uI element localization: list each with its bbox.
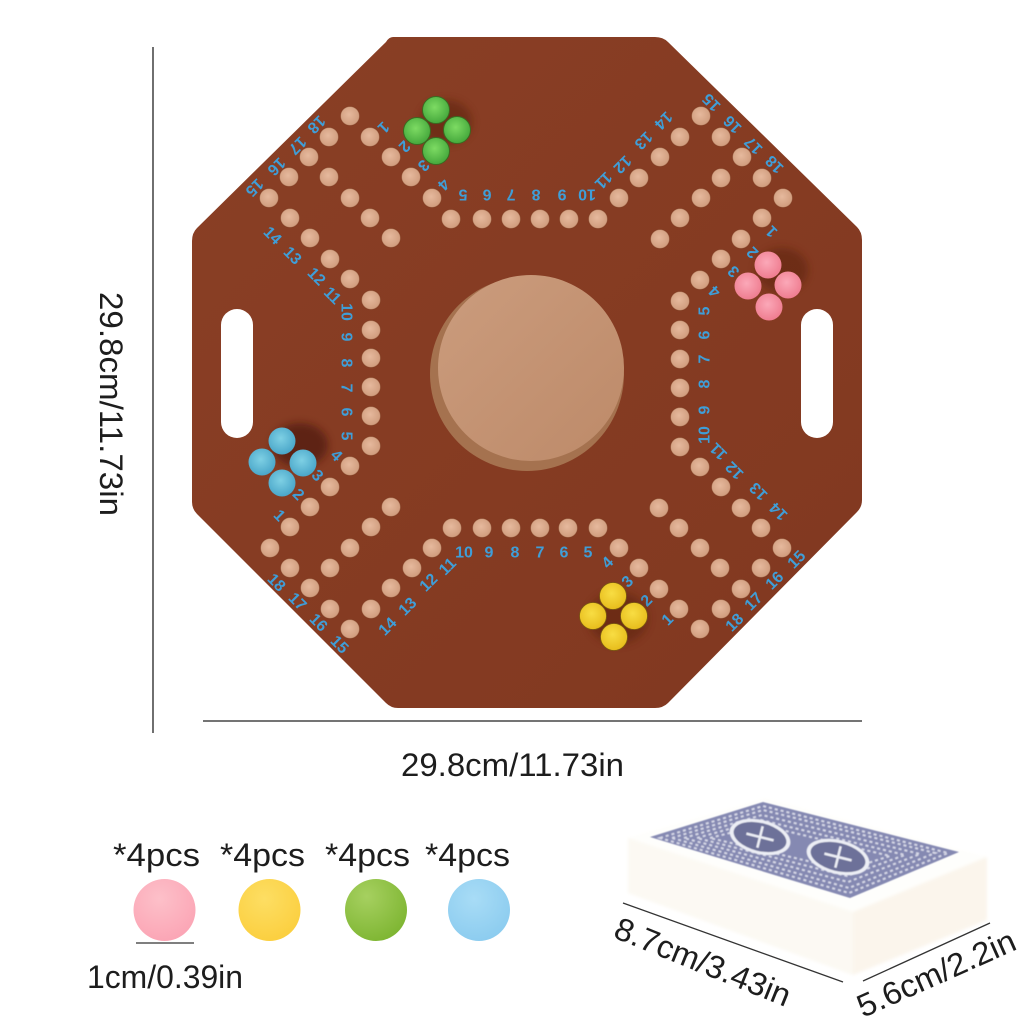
numbers: left arm: 2 (289, 486, 307, 504)
board body: octagon with handles (192, 37, 862, 708)
numbers: left arm: 7 (338, 384, 354, 393)
marble size line (136, 942, 194, 944)
numbers: right arm: 14 (767, 499, 791, 523)
quantity label: green: *4pcs (325, 837, 410, 873)
numbers: bottom arm: 6 (560, 544, 569, 562)
numbers: left arm: 16 (264, 154, 288, 178)
numbers: left arm: 4 (327, 447, 345, 465)
pink marble (134, 879, 196, 941)
numbers: top arm: 3 (414, 156, 432, 174)
quantity label: pink: *4pcs (113, 837, 200, 873)
blue marble (448, 879, 510, 941)
green marbles (404, 96, 472, 164)
numbers: left arm: 6 (338, 408, 354, 417)
numbers: bottom arm: 14 (376, 615, 400, 639)
numbers: left arm: 11 (320, 284, 344, 308)
deck width line (863, 923, 990, 981)
numbers: bottom arm: 3 (619, 573, 637, 591)
numbers: top arm: 5 (458, 186, 467, 202)
numbers: top arm: 8 (531, 186, 540, 202)
numbers: left arm: 17 (285, 133, 309, 157)
numbers: right arm (696, 222, 809, 635)
pink marbles (734, 248, 808, 320)
height label: 29.8cm/11.73in (93, 292, 129, 516)
peg holes (260, 106, 792, 638)
numbers: left arm: 18 (304, 112, 328, 136)
numbers: top arm: 18 (763, 152, 787, 176)
deck of cards (609, 798, 1021, 1024)
numbers: top arm: 14 (651, 108, 675, 132)
numbers: right arm: 11 (707, 439, 731, 463)
numbers: right arm: 15 (785, 548, 809, 572)
numbers: right arm: 4 (706, 282, 724, 300)
blue marbles (248, 423, 328, 496)
numbers: right arm: 12 (723, 458, 747, 482)
numbers: bottom arm: 8 (511, 544, 520, 562)
height dimension line (152, 47, 154, 733)
numbers: bottom arm: 7 (536, 544, 545, 562)
numbers: right arm: 9 (696, 405, 714, 414)
numbers: left arm: 10 (338, 303, 354, 321)
yellow marbles (580, 582, 648, 650)
numbers: top arm (374, 90, 787, 202)
numbers: bottom arm: 9 (485, 544, 494, 562)
deck body (628, 798, 987, 975)
marble legend (87, 837, 510, 995)
numbers: right arm: 16 (763, 569, 787, 593)
numbers: left arm (242, 112, 354, 525)
marble size label: 1cm/0.39in (87, 959, 243, 995)
numbers: right arm: 7 (696, 354, 714, 363)
numbers: bottom arm: 17 (285, 590, 309, 614)
numbers: top arm: 4 (434, 175, 452, 193)
numbers: top arm: 12 (610, 152, 634, 176)
numbers: top arm: 16 (721, 112, 745, 136)
numbers: top arm: 6 (482, 186, 491, 202)
numbers: bottom arm: 1 (659, 611, 677, 629)
deck length line (623, 903, 843, 982)
numbers: right arm: 13 (747, 479, 771, 503)
numbers: right arm: 17 (742, 590, 766, 614)
numbers: bottom arm: 12 (417, 571, 441, 595)
numbers: left arm: 5 (338, 432, 354, 441)
numbers: bottom arm (264, 544, 677, 657)
numbers: right arm: 1 (763, 222, 781, 240)
yellow marble (238, 879, 300, 941)
centre recess (430, 275, 624, 471)
deck length label: 8.7cm/3.43in (609, 910, 796, 1014)
numbers: top arm: 10 (578, 186, 596, 202)
numbers: top arm: 13 (631, 128, 655, 152)
numbers: top arm: 15 (700, 90, 724, 114)
numbers: bottom arm: 2 (638, 592, 656, 610)
numbers: left arm: 13 (280, 244, 304, 268)
green marble (345, 879, 407, 941)
numbers: left arm: 14 (260, 224, 284, 248)
numbers: right arm: 10 (696, 426, 714, 444)
card back pattern (650, 802, 959, 898)
numbers: top arm: 17 (742, 133, 766, 157)
quantity label: blue: *4pcs (425, 837, 510, 873)
numbers: bottom arm: 10 (455, 544, 473, 562)
numbers: bottom arm: 5 (584, 544, 593, 562)
numbers: left arm: 3 (308, 467, 326, 485)
game board (192, 37, 862, 708)
width dimension line (203, 720, 862, 722)
numbers: left arm: 12 (304, 265, 328, 289)
numbers: bottom arm: 11 (436, 555, 460, 579)
numbers: top arm: 9 (557, 186, 566, 202)
numbers: bottom arm: 15 (327, 633, 351, 657)
numbers: right arm: 5 (696, 306, 714, 315)
quantity label: yellow: *4pcs (220, 837, 305, 873)
numbers: left arm: 1 (270, 507, 288, 525)
numbers: left arm: 9 (338, 333, 354, 342)
numbers: right arm: 6 (696, 330, 714, 339)
numbers: right arm: 8 (696, 379, 714, 388)
numbers: bottom arm: 18 (264, 571, 288, 595)
deck width label: 5.6cm/2.2in (851, 922, 1021, 1024)
numbers: top arm: 1 (374, 118, 392, 136)
numbers: right arm: 18 (723, 611, 747, 635)
numbers: left arm: 8 (338, 359, 354, 368)
numbers: bottom arm: 4 (599, 554, 617, 572)
numbers: top arm: 7 (506, 186, 515, 202)
numbers: right arm: 2 (744, 243, 762, 261)
numbers: right arm: 3 (725, 262, 743, 280)
numbers: top arm: 11 (591, 168, 615, 192)
numbers: bottom arm: 16 (306, 611, 330, 635)
numbers: bottom arm: 13 (396, 595, 420, 619)
numbers: left arm: 15 (242, 175, 266, 199)
numbers: top arm: 2 (395, 137, 413, 155)
width label: 29.8cm/11.73in (401, 747, 624, 783)
